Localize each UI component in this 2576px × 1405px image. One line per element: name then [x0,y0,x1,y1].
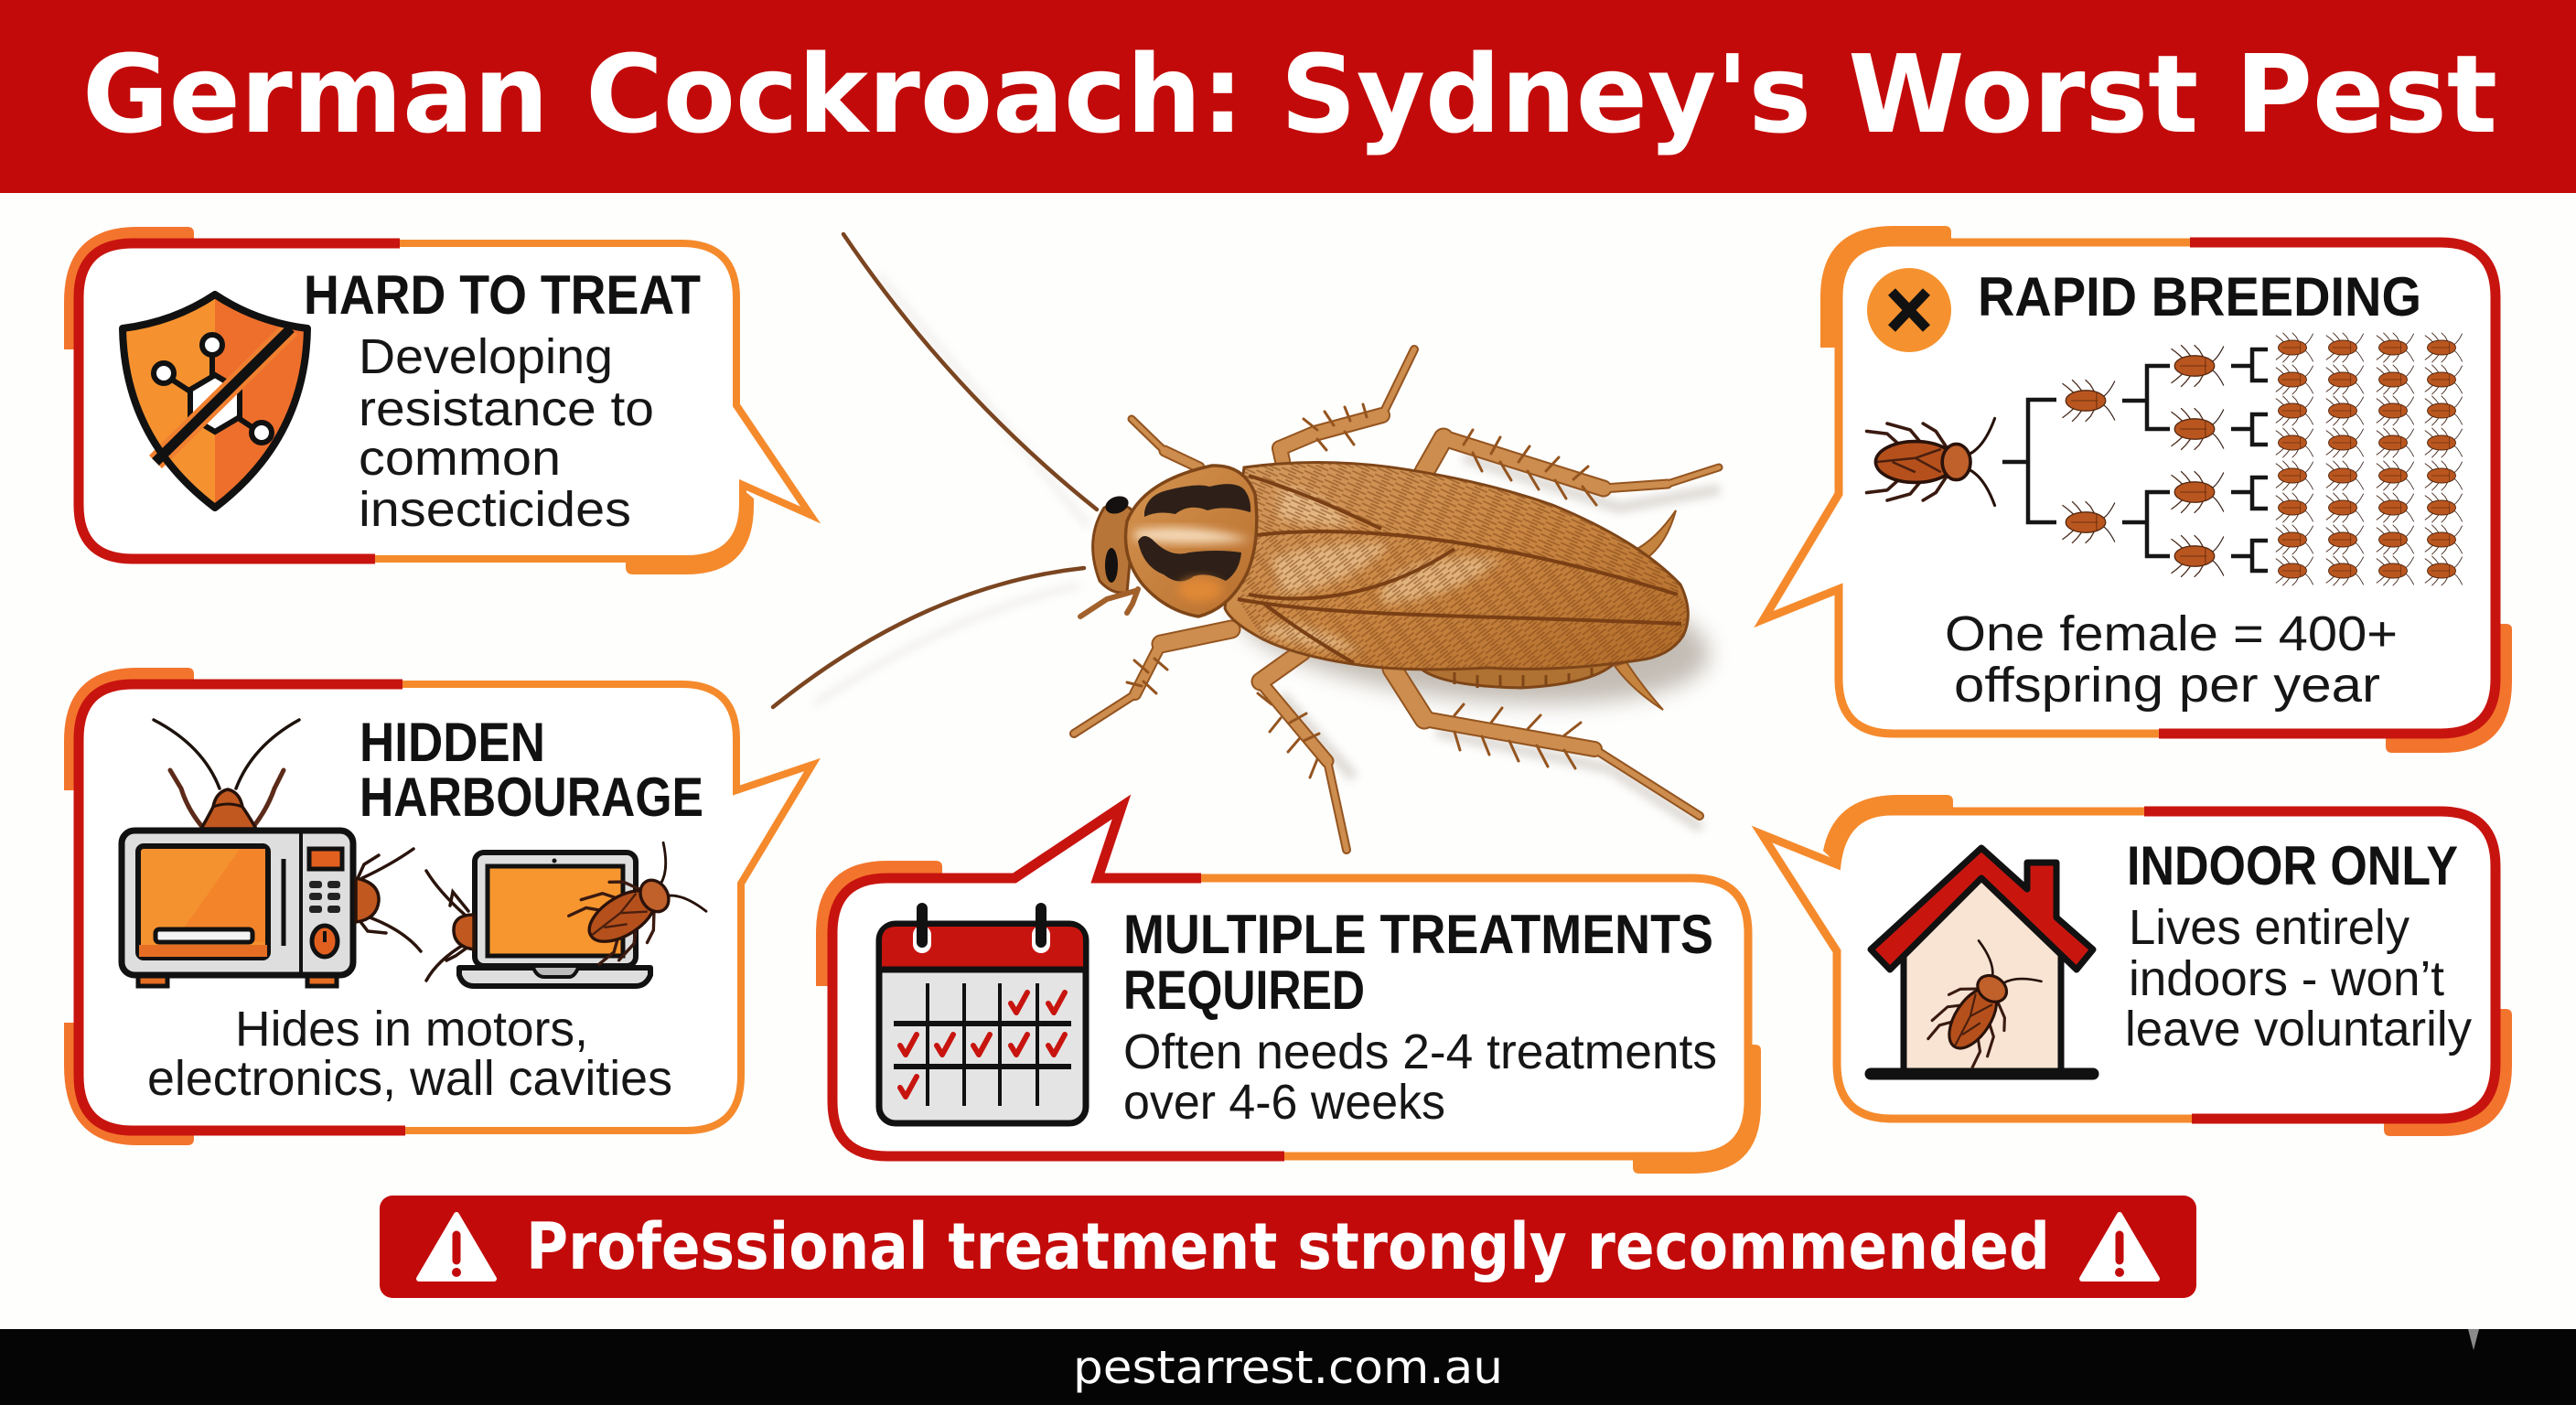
wing veins upper [1245,464,1680,593]
body text: indoors - won’t [2129,951,2444,1006]
pronotum dark bands [1138,484,1250,582]
title banner: German Cockroach: Sydney's Worst Pest [82,31,2497,157]
body text: Developing [359,329,613,384]
heading [1123,904,1713,1021]
generation two [2063,381,2115,542]
central illustration: German cockroach [773,234,1720,850]
bubble outline [79,243,810,559]
callout text: Professional treatment strongly recommended [526,1209,2050,1284]
mouthparts [1080,589,1138,617]
title banner [0,0,2576,193]
heading: HARBOURAGE [360,767,703,828]
head [1093,504,1134,593]
wing veins lower [1239,533,1687,668]
body text: Lives entirely [2129,900,2410,955]
bubble outline [1762,811,2496,1119]
cerci [1615,510,1676,710]
body text: electronics, wall cavities [147,1051,672,1106]
chart: breeding family tree [1867,333,2463,585]
heading: HIDDEN [360,712,545,773]
wing highlights [1258,485,1500,651]
panel: hard to treat [64,227,810,574]
bubble outline [1764,242,2496,734]
icon: roach beside laptop [426,871,474,981]
bubble accents [1820,226,2512,753]
body text: resistance to [359,381,654,436]
body text [359,329,654,537]
footer bar: pestarrest.com.au [1073,1341,1503,1394]
body text [147,1002,672,1106]
callout banner [380,1196,2196,1298]
bubble accents [816,861,1761,1174]
panel: hidden harbourage [64,668,812,1145]
leg spines [1127,404,1596,778]
icon: roach beside microwave [356,849,421,951]
body text [1945,606,2398,713]
antenna shadows [814,274,1089,704]
panel: indoor only [1762,795,2512,1136]
bubble outline [832,807,1748,1156]
icon: roach on top of microwave [154,720,299,829]
legs fill [1074,349,1719,850]
female roach [1867,418,1995,506]
icon: orange circle with X [1867,268,1951,352]
icon: warning triangle left [419,1215,494,1279]
body text: leave voluntarily [2125,1002,2472,1056]
icon: microwave [122,831,353,986]
wing ridges [1238,476,1681,663]
heading: REQUIRED [1123,960,1365,1021]
panel: multiple treatments required [816,807,1761,1174]
icon: calendar [879,908,1086,1123]
body text: over 4-6 weeks [1123,1075,1445,1130]
leg shadows [1281,457,1720,828]
footer bar [0,1329,2576,1405]
antennae [773,234,1097,707]
body text: common [359,431,561,486]
bubble accents [1823,795,2512,1136]
wings [1225,463,1688,670]
abdomen segments [1418,660,1617,688]
icon: shield with struck molecule [123,295,307,508]
generation three [2172,346,2224,576]
body text [2125,900,2472,1056]
icon: roach on laptop [563,842,706,974]
icon: warning triangle right [2082,1215,2157,1279]
pronotum highlight [1134,528,1251,543]
panel: rapid breeding [1764,226,2512,753]
icon: house with roach [1871,848,2093,1074]
body text: Often needs 2-4 treatments [1123,1024,1717,1079]
bubble outline [79,684,812,1131]
legs outline [1074,349,1719,850]
heading: INDOOR ONLY [2127,835,2458,896]
body text: Hides in motors, [235,1002,588,1056]
body text [1123,1024,1717,1130]
bubble accents [64,668,194,1145]
heading: HARD TO TREAT [304,264,701,326]
heading: RAPID BREEDING [1978,266,2421,327]
icon: laptop [459,853,650,986]
pronotum [1125,466,1257,617]
body text: insecticides [359,482,631,537]
orange pronotum patch [1178,578,1222,602]
heading [360,712,703,828]
body text: offspring per year [1954,658,2380,713]
body shadow [1229,538,1716,724]
eyes [1103,493,1131,583]
heading: MULTIPLE TREATMENTS [1123,904,1713,965]
tree lines [2002,349,2268,571]
offspring grid [2276,333,2463,585]
body text: One female = 400+ [1945,606,2398,661]
bubble accents [64,227,754,574]
